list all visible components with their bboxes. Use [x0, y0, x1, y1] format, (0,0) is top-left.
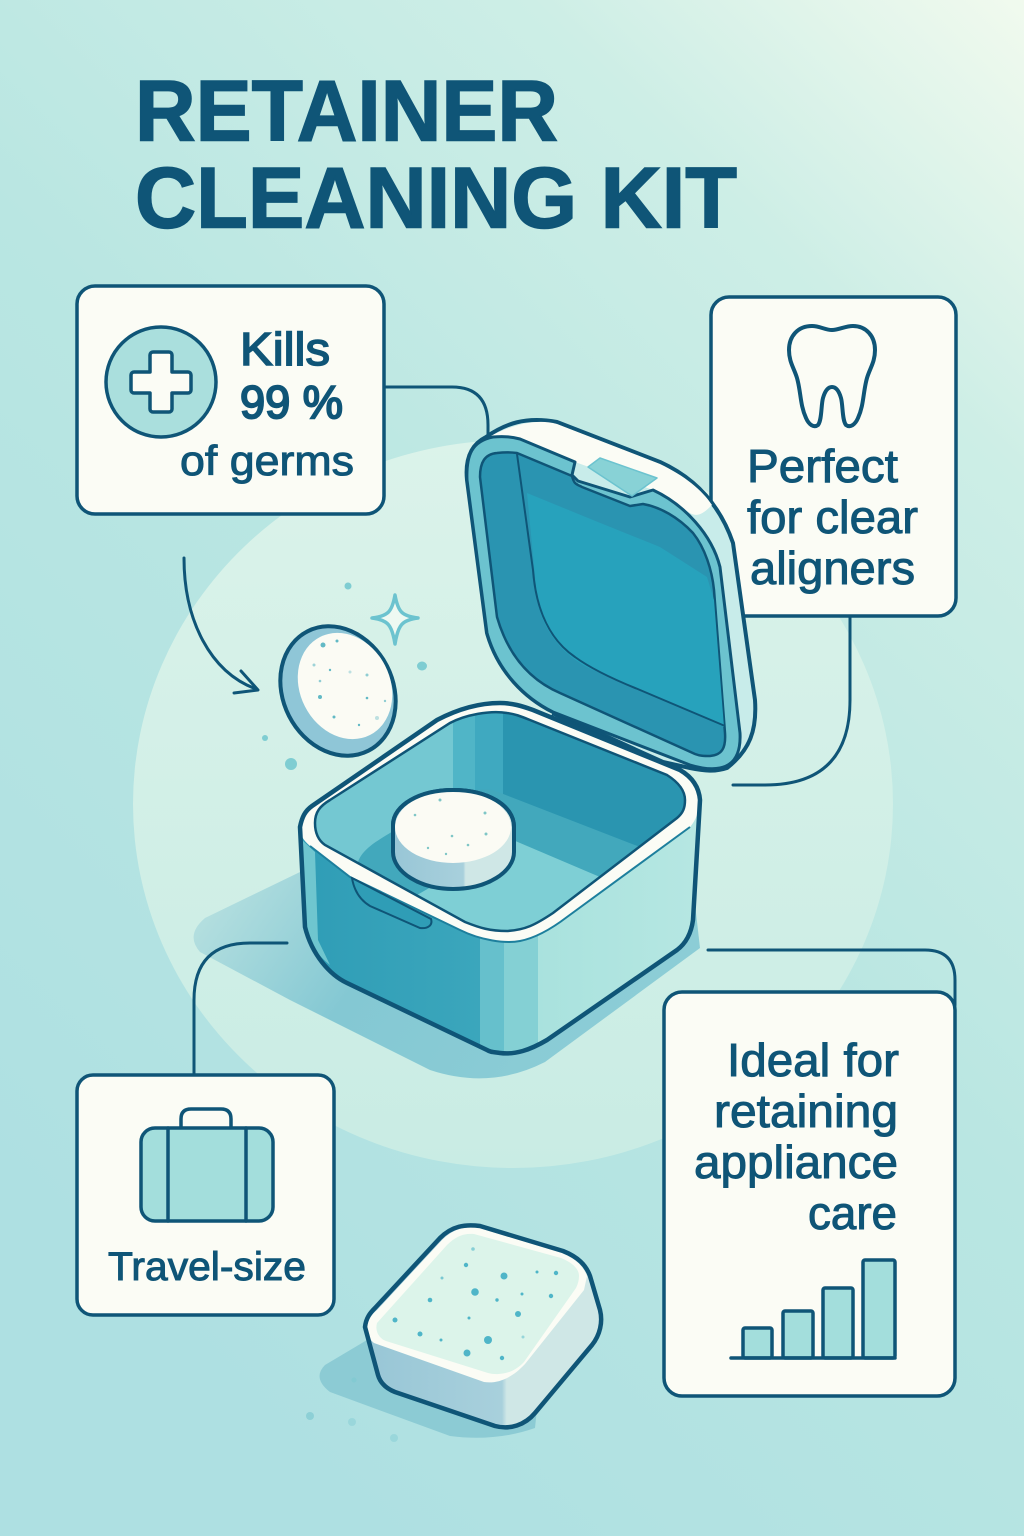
card text — [747, 440, 918, 594]
icon: bar chart — [731, 1260, 895, 1358]
case interior — [316, 713, 684, 930]
title: RETAINER — [135, 64, 558, 160]
card text: appliance — [694, 1136, 898, 1188]
rim — [300, 703, 700, 942]
card text: for clear — [747, 491, 918, 543]
lid latch — [588, 458, 657, 496]
hinge — [551, 714, 662, 765]
shadow under case — [194, 860, 700, 1078]
left edge highlight — [302, 840, 330, 965]
large tablet — [365, 1225, 601, 1427]
card text: retaining — [714, 1085, 898, 1137]
panel: kills germs — [77, 286, 384, 514]
large tablet shadow — [320, 1340, 540, 1438]
icon: suitcase — [141, 1109, 273, 1221]
outer outline — [300, 703, 700, 1053]
title: CLEANING KIT — [135, 150, 737, 246]
card text: Kills — [240, 323, 330, 375]
card text: Perfect — [747, 440, 898, 492]
connector: travel card to case — [194, 943, 287, 1075]
card text: Travel-size — [108, 1245, 306, 1289]
card text: 99 % — [240, 376, 343, 428]
speckles — [392, 1247, 558, 1360]
card text: of germs — [180, 437, 354, 484]
card text: aligners — [750, 542, 915, 594]
sparkle — [372, 595, 418, 644]
icon: medical plus — [106, 327, 216, 437]
rim edge line — [310, 827, 690, 942]
card text: care — [808, 1187, 897, 1239]
tablet in water — [393, 790, 514, 889]
background circle — [133, 440, 893, 1168]
tablet speckles — [312, 640, 386, 726]
case base — [300, 700, 700, 1053]
fizz dots — [262, 582, 427, 770]
connector: appliance card to case — [708, 950, 955, 1005]
panel: appliance care — [664, 992, 955, 1396]
card text: Ideal for — [727, 1034, 899, 1086]
crumbs — [306, 1378, 398, 1442]
panel: clear aligners — [711, 297, 956, 616]
connector: aligners card to lid — [733, 617, 850, 785]
arrow: to falling tablet — [184, 558, 258, 693]
falling tablet — [259, 606, 417, 776]
card text — [694, 1034, 899, 1239]
front latch — [352, 878, 431, 928]
case lid — [467, 420, 755, 771]
panel: travel-size — [77, 1075, 334, 1315]
card text — [180, 323, 354, 484]
title — [135, 64, 737, 246]
icon: tooth — [789, 326, 875, 426]
interior outline — [315, 712, 685, 931]
connector: germs card to lid — [386, 387, 488, 437]
